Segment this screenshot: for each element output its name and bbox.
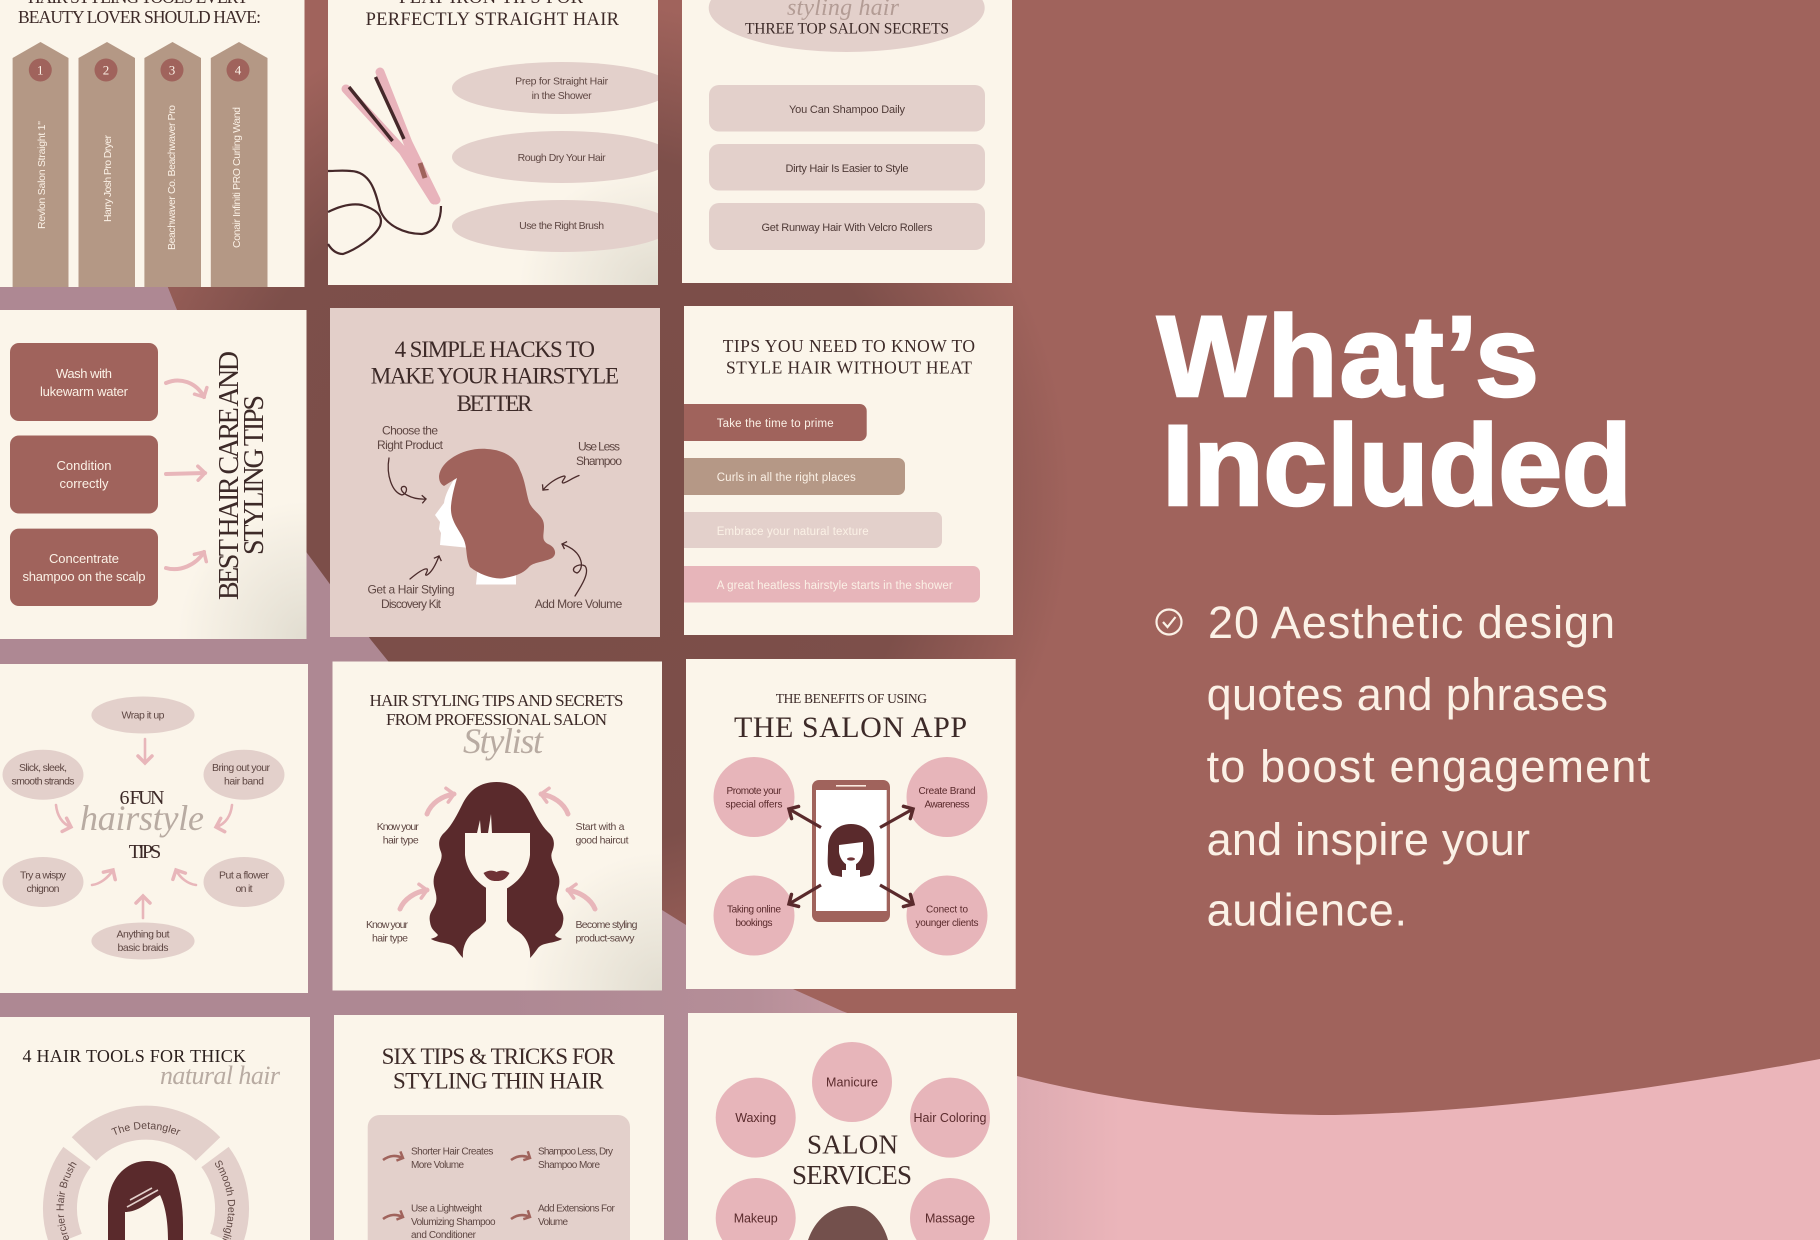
heading: without heat: STYLE HAIR WITHOUT HEAT [726, 358, 972, 378]
panel: six tips and tricks [334, 1015, 664, 1240]
background: dark shadow behind the panel grid [0, 0, 1140, 1240]
text block: description: 20 Aesthetic design [1208, 597, 1615, 648]
vertical heading: BEST HAIR CARE AND [214, 351, 245, 600]
title: What's Included: What’s [1157, 293, 1539, 421]
benefit labels: Awareness [924, 800, 970, 810]
centre title: hairstyle [80, 798, 204, 838]
tips text: More Volume [411, 1160, 464, 1171]
heading: salon services: SERVICES [792, 1160, 912, 1190]
tip bar labels: Curls in all the right places [717, 472, 856, 484]
service circles [716, 1042, 990, 1240]
icon: check circle [1156, 610, 1182, 634]
illustration: woman with bangs [430, 782, 563, 958]
hack labels: Shampoo [576, 454, 622, 468]
secret labels: Dirty Hair Is Easier to Style [786, 163, 908, 175]
panel: 6 fun hairstyle tips [0, 664, 308, 993]
number badges: 3 [169, 62, 175, 78]
tip labels: Bring out your [212, 762, 270, 774]
tip bar labels: Embrace your natural texture [717, 526, 869, 538]
text block: description [1207, 597, 1650, 936]
heading: salon secrets [370, 691, 624, 729]
heading: flat iron tips: PERFECTLY STRAIGHT HAIR [366, 10, 620, 30]
stylist labels: good haircut [576, 835, 629, 847]
panel: flat iron tips [328, 0, 672, 285]
tool names: Conair Infiniti PRO Curling Wand [231, 107, 243, 248]
benefit labels: Conect to [926, 904, 968, 916]
heading: simple hacks: BETTER [457, 391, 533, 416]
panel: 4 simple hacks [330, 308, 660, 637]
heading: salon app: THE SALON APP [734, 711, 967, 744]
service labels [734, 1076, 987, 1226]
title: What's Included: Included [1162, 402, 1632, 530]
icon: flat iron [328, 72, 441, 254]
tips text: Shampoo Less, Dry [538, 1147, 613, 1158]
tip ovals [2, 696, 284, 960]
shadow corner [0, 310, 306, 639]
tool columns [13, 42, 267, 287]
vertical heading [214, 351, 270, 600]
stylist labels [366, 821, 638, 945]
heading: simple hacks: 4 SIMPLE HACKS TO [395, 337, 595, 362]
tip labels: Use the Right Brush [519, 220, 604, 232]
heading: six tips [382, 1044, 616, 1094]
dark arrows [789, 809, 913, 904]
heading: six tips: STYLING THIN HAIR [393, 1068, 604, 1094]
tip labels [515, 76, 609, 232]
small arrows [383, 1156, 530, 1219]
hack labels: Discovery Kit [381, 597, 442, 611]
tips text: Add Extensions For [538, 1203, 615, 1214]
tip labels: basic braids [118, 942, 168, 954]
panel: tips from professional salon stylist [332, 662, 662, 990]
thin arrows [388, 458, 587, 596]
script: stylist: Stylist [463, 721, 544, 761]
centre title [80, 787, 204, 863]
heading: salon app: THE BENEFITS OF USING [776, 691, 927, 706]
ring segments [60, 1123, 232, 1240]
panel: the salon app [686, 659, 1016, 989]
tip labels: on it [236, 883, 253, 895]
panel: tips to style hair without heat [670, 306, 1013, 635]
secret bars [709, 85, 985, 250]
tips text: Volume [538, 1217, 568, 1228]
panel: best hair care tips [0, 310, 306, 639]
tip bars [670, 404, 980, 602]
stylist labels: Start with a [576, 821, 625, 833]
centre title: 6 FUN [120, 787, 164, 809]
stylist labels: Know your [366, 919, 408, 931]
number badges: 2 [103, 62, 109, 78]
service labels: Hair Coloring [914, 1111, 987, 1125]
benefit labels [726, 786, 978, 929]
heading: salon secrets: HAIR STYLING TIPS AND SECRETS [370, 691, 624, 710]
benefit labels: younger clients [916, 918, 978, 929]
tip labels: Put a flower [219, 869, 270, 881]
tips text: Volumizing Shampoo [411, 1217, 496, 1228]
tip labels: smooth strands [12, 776, 74, 788]
heading: without heat [723, 336, 975, 378]
tip labels: Slick, sleek, [19, 762, 67, 774]
heading: without heat: TIPS YOU NEED TO KNOW TO [723, 336, 975, 356]
illustration: woman profile [435, 449, 555, 584]
heading: hair styling tools: BEAUTY LOVER SHOULD HAVE: [18, 7, 261, 27]
heading: salon services [792, 1130, 912, 1190]
tip labels: Wrap it up [122, 710, 165, 722]
hack labels: Get a Hair Styling [368, 582, 454, 596]
number badges [29, 58, 249, 82]
care tip boxes [10, 343, 158, 606]
tip labels: hair band [224, 776, 264, 788]
tip labels: Rough Dry Your Hair [518, 152, 606, 164]
stylist labels: Know your [377, 821, 419, 833]
panel: 4 hair tools for thick natural hair [0, 1017, 310, 1240]
benefit labels: Promote your [726, 786, 782, 797]
care tip labels: Concentrate [49, 551, 119, 566]
text block: description: quotes and phrases [1207, 669, 1608, 720]
service labels: Manicure [826, 1076, 878, 1090]
tip labels: chignon [26, 883, 60, 895]
panel: three top salon secrets [682, 0, 1012, 283]
shadow corner [328, 0, 658, 285]
illustration: hair top [808, 1206, 888, 1240]
care tip labels: lukewarm water [40, 384, 129, 399]
number badges: 4 [235, 62, 242, 78]
heading: flat iron tips [366, 0, 620, 30]
hack labels: Use Less [578, 440, 620, 454]
heading oval [709, 0, 985, 52]
tip bar labels: A great heatless hairstyle starts in the shower [717, 580, 953, 592]
care tip labels: Condition [56, 458, 112, 473]
tips card [368, 1115, 630, 1240]
secret labels: You Can Shampoo Daily [789, 104, 906, 116]
care tip labels: shampoo on the scalp [22, 569, 146, 584]
hack labels: Add More Volume [535, 597, 623, 611]
ring labels [56, 1122, 236, 1240]
stylist labels: hair type [383, 835, 419, 847]
heading: six tips: SIX TIPS & TRICKS FOR [382, 1044, 616, 1069]
heading: simple hacks: MAKE YOUR HAIRSTYLE [371, 364, 619, 389]
heading: salon app [734, 691, 967, 744]
benefit labels: special offers [726, 800, 782, 810]
benefit labels: Taking online [727, 904, 781, 916]
tool names [36, 105, 243, 250]
hack labels: Right Product [377, 438, 444, 452]
tips text [411, 1147, 615, 1240]
text block: description: and inspire your [1207, 814, 1530, 865]
heading: hair tools: 4 HAIR TOOLS FOR THICK [22, 1046, 246, 1066]
number badges: 1 [37, 62, 44, 78]
tip labels: Try a wispy [20, 869, 67, 881]
panel: hair styling tools [0, 0, 304, 287]
stylist labels: hair type [372, 933, 408, 945]
pink arrows [56, 739, 232, 918]
heading: simple hacks [371, 337, 619, 416]
tips text: Shorter Hair Creates [411, 1147, 493, 1158]
secret labels [762, 104, 933, 234]
text block: description: to boost engagement [1207, 741, 1650, 792]
hack labels: Choose the [382, 424, 438, 438]
service labels: Massage [925, 1212, 975, 1226]
icon: phone [812, 780, 890, 922]
care tip labels: Wash with [56, 366, 112, 381]
heading: salon secrets: FROM PROFESSIONAL SALON [386, 710, 607, 729]
tip ovals [452, 62, 672, 252]
pink arrows [166, 381, 205, 569]
benefit labels: Create Brand [918, 786, 976, 797]
panel: salon services [688, 1013, 1017, 1240]
hack labels [368, 424, 623, 611]
pink arrows [400, 794, 595, 909]
shadow corner [332, 662, 662, 990]
tip bar labels: Take the time to prime [717, 418, 834, 430]
heading: salon services: SALON [807, 1130, 898, 1160]
tool names: Revlon Salon Straight 1" [36, 121, 48, 229]
illustration: head [108, 1161, 183, 1240]
care tip labels: correctly [60, 476, 109, 491]
text block: description: audience. [1207, 885, 1407, 936]
tip bar labels [717, 418, 953, 592]
tool names: Beachwaver Co. Beachwaver Pro [166, 105, 178, 250]
tips text: Use a Lightweight [411, 1203, 482, 1214]
stylist labels: Become styling [576, 919, 638, 931]
tips text: Shampoo More [538, 1160, 600, 1171]
heading: three top salon secrets: THREE TOP SALON SECRETS [745, 20, 949, 38]
centre title: TIPS [129, 841, 161, 863]
tip labels: Anything but [116, 929, 170, 941]
service labels: Waxing [735, 1111, 776, 1125]
title: What's Included [1157, 293, 1632, 530]
tip labels [12, 710, 270, 954]
background: mauve to pink wave [0, 280, 1820, 1240]
secret labels: Get Runway Hair With Velcro Rollers [762, 222, 933, 234]
tool names: Harry Josh Pro Dryer [102, 134, 114, 222]
benefit circles [714, 757, 988, 956]
ring labels: The Detangler [111, 1122, 180, 1135]
script: natural hair: natural hair [160, 1061, 281, 1090]
tip labels: Prep for Straight Hair [515, 76, 609, 88]
tip labels: in the Shower [532, 90, 592, 102]
vertical heading: STYLING TIPS [239, 395, 270, 555]
care tip labels [22, 366, 146, 584]
benefit labels: bookings [736, 918, 772, 929]
service labels: Makeup [734, 1212, 778, 1226]
stylist labels: product-savvy [576, 933, 635, 945]
